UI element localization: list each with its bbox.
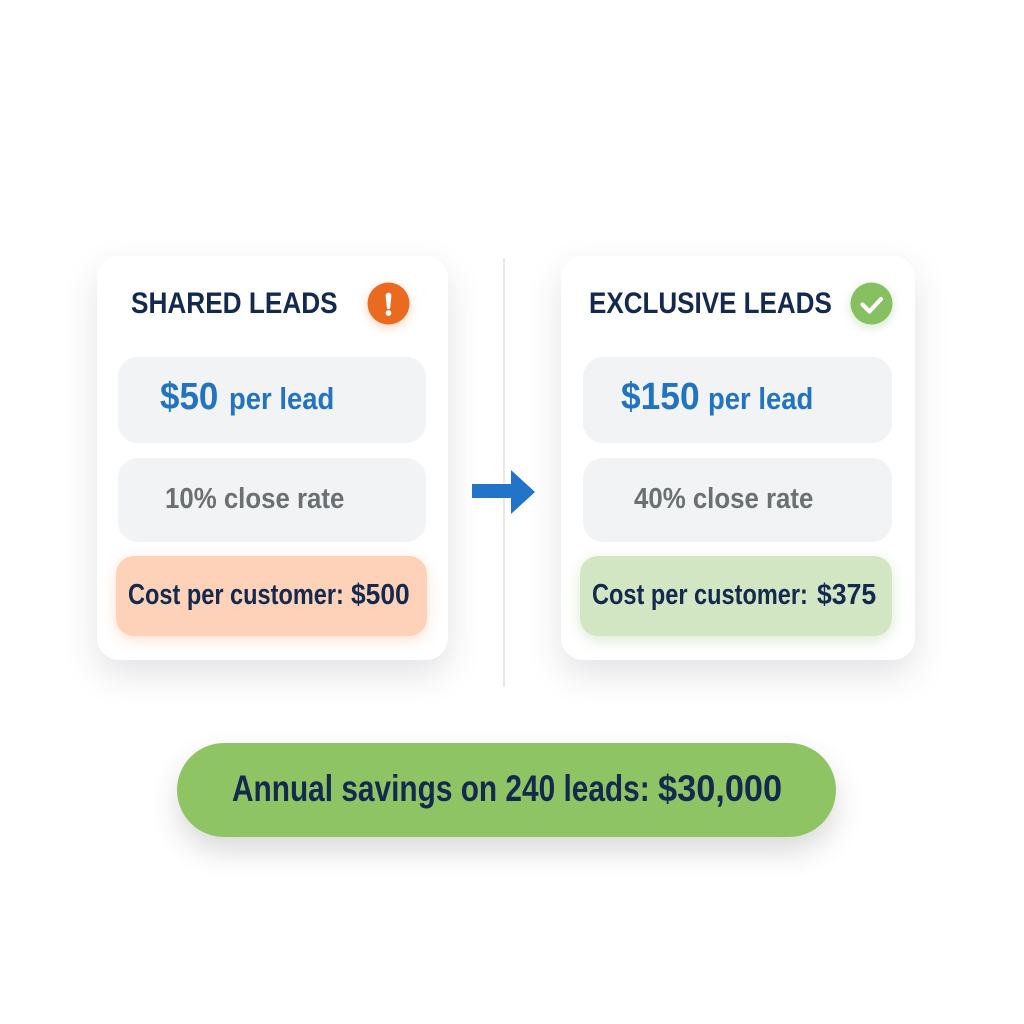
price unit: per lead bbox=[229, 381, 334, 416]
cost per customer row bbox=[580, 556, 892, 636]
cost label: Cost per customer: bbox=[592, 579, 808, 611]
price amount: $150 bbox=[621, 376, 700, 418]
cost label: Cost per customer: bbox=[128, 579, 344, 611]
close rate text: 10% close rate bbox=[165, 483, 344, 515]
price unit: per lead bbox=[708, 381, 813, 416]
close rate text: 40% close rate bbox=[634, 483, 813, 515]
savings amount: $30,000 bbox=[658, 768, 782, 809]
heading: exclusive leads: EXCLUSIVE LEADS bbox=[589, 287, 832, 320]
cost per customer row bbox=[116, 556, 427, 636]
savings banner bbox=[177, 743, 836, 837]
divider bbox=[503, 258, 505, 687]
close rate row bbox=[583, 458, 892, 542]
close rate row bbox=[118, 458, 426, 542]
icon: warning bbox=[362, 280, 414, 332]
savings label: Annual savings on 240 leads: bbox=[232, 768, 650, 809]
cost amount: $500 bbox=[351, 579, 410, 611]
heading: shared leads: SHARED LEADS bbox=[131, 287, 338, 320]
cost amount: $375 bbox=[817, 579, 876, 611]
price amount: $50 bbox=[160, 376, 218, 418]
price row bbox=[118, 357, 426, 443]
arrow bbox=[472, 470, 535, 514]
icon: check bbox=[846, 281, 896, 332]
price row bbox=[583, 357, 892, 443]
panel: shared leads bbox=[97, 256, 448, 660]
panel: exclusive leads bbox=[561, 256, 915, 660]
